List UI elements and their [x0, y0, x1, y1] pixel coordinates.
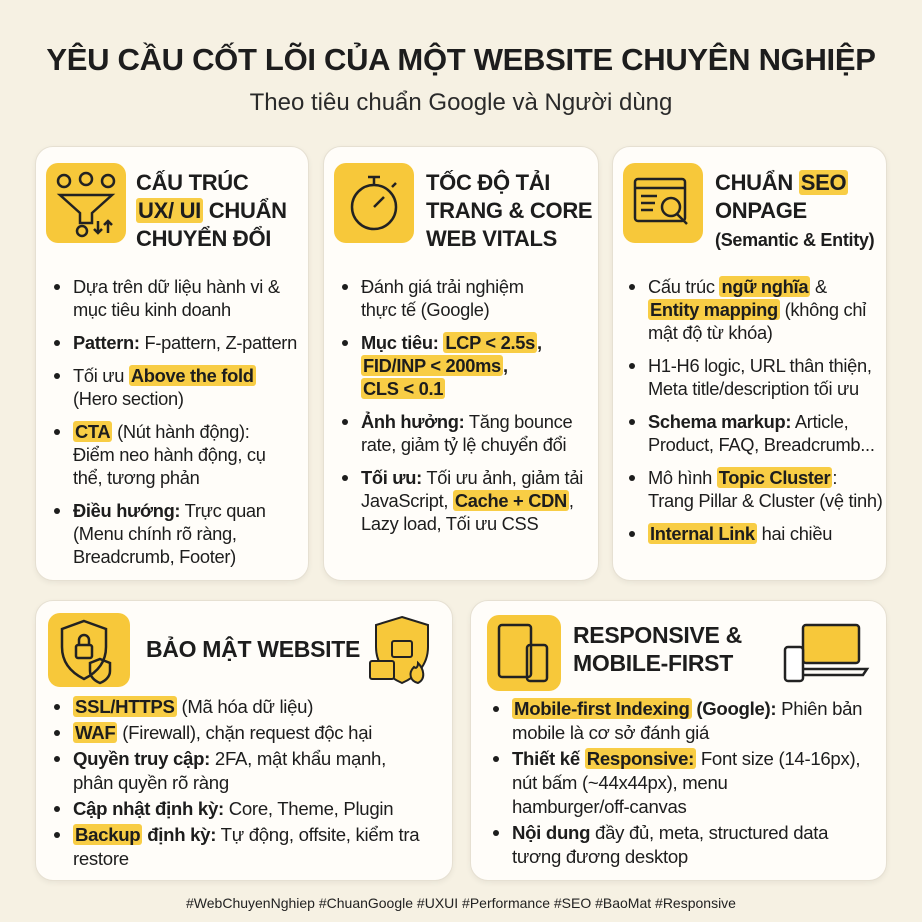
bullets: SSL/HTTPS (Mã hóa dữ liệu): [75, 696, 313, 717]
bullets: Lazy load, Tối ưu CSS: [361, 513, 538, 534]
bullets: Điều hướng: Trực quan: [73, 500, 266, 521]
bullets: phân quyền rõ ràng: [73, 772, 229, 793]
bullets: Nội dung đầy đủ, meta, structured data: [512, 822, 828, 843]
panel: SEO: [612, 146, 887, 581]
bullets: Ảnh hưởng: Tăng bounce: [361, 411, 572, 432]
bullets: restore: [73, 848, 129, 869]
heading: CHUẨN SEO: [715, 170, 846, 195]
bullets: Điểm neo hành động, cụ: [73, 444, 266, 465]
heading: UX/ UI CHUẨN: [138, 198, 287, 223]
icon: laptop & phone: [784, 624, 870, 682]
bullets: [54, 276, 297, 567]
heading: TRANG & CORE: [426, 198, 592, 223]
bullets: Backup định kỳ: Tự động, offsite, kiểm tra: [75, 824, 419, 845]
heading: WEB VITALS: [426, 226, 557, 251]
bullets: Mô hình Topic Cluster:: [648, 467, 837, 488]
bullets: mục tiêu kinh doanh: [73, 299, 231, 320]
bullets: JavaScript, Cache + CDN,: [361, 490, 574, 511]
bullets: FID/INP < 200ms,: [363, 355, 508, 376]
icon: SEO window: [623, 163, 703, 243]
bullets: Meta title/description tối ưu: [648, 378, 859, 399]
heading: [136, 170, 287, 251]
heading: MOBILE-FIRST: [573, 650, 733, 676]
bullets: Dựa trên dữ liệu hành vi &: [73, 276, 280, 297]
heading: CHUYỂN ĐỔI: [136, 226, 271, 251]
bullets: Product, FAQ, Breadcrumb...: [648, 434, 875, 455]
heading: BẢO MẬT WEBSITE: [146, 636, 360, 662]
bullets: Cấu trúc ngữ nghĩa &: [648, 276, 827, 297]
bullets: Tối ưu Above the fold: [73, 365, 254, 386]
heading: TỐC ĐỘ TẢI: [426, 170, 550, 195]
bullets: [629, 276, 883, 544]
bullets: tương đương desktop: [512, 846, 688, 867]
bullets: Tối ưu: Tối ưu ảnh, giảm tải: [361, 467, 583, 488]
bullets: Trang Pillar & Cluster (vệ tinh): [648, 490, 883, 511]
panel: UX/UI: [35, 146, 309, 581]
bullets: (Hero section): [73, 388, 184, 409]
bullets: Entity mapping (không chỉ: [650, 299, 866, 320]
heading: [573, 622, 742, 676]
panel: security: [35, 600, 453, 881]
bullets: thực tế (Google): [361, 299, 489, 320]
bullets: nút bấm (~44x44px), menu: [512, 772, 728, 793]
bullets: Quyền truy cập: 2FA, mật khẩu mạnh,: [73, 748, 386, 769]
heading: RESPONSIVE &: [573, 622, 742, 648]
bullets: mật độ từ khóa): [648, 322, 773, 343]
bullets: Đánh giá trải nghiệm: [361, 276, 524, 297]
bullets: [342, 276, 583, 534]
bullets: CLS < 0.1: [363, 378, 443, 399]
bullets: WAF (Firewall), chặn request độc hại: [75, 722, 372, 743]
bullets: Pattern: F-pattern, Z-pattern: [73, 332, 297, 353]
bullets: hamburger/off-canvas: [512, 796, 687, 817]
bullets: Mobile-first Indexing (Google): Phiên bản: [514, 698, 862, 719]
icon: ssl lock: [369, 616, 429, 684]
bullets: Cập nhật định kỳ: Core, Theme, Plugin: [73, 798, 393, 819]
bullets: Breadcrumb, Footer): [73, 546, 236, 567]
heading: [426, 170, 592, 251]
icon: shield: [48, 613, 130, 687]
bullets: Schema markup: Article,: [648, 411, 848, 432]
bullets: CTA (Nút hành động):: [75, 421, 250, 442]
heading: ONPAGE: [715, 198, 807, 223]
bullets: Thiết kế Responsive: Font size (14-16px),: [512, 748, 860, 769]
bullets: rate, giảm tỷ lệ chuyển đổi: [361, 434, 566, 455]
subtitle: Theo tiêu chuẩn Google và Người dùng: [250, 89, 672, 116]
panel: responsive: [470, 600, 887, 881]
bullets: Mục tiêu: LCP < 2.5s,: [361, 332, 542, 353]
bullets: thể, tương phản: [73, 467, 199, 488]
bullets: H1-H6 logic, URL thân thiện,: [648, 355, 872, 376]
icon: funnel: [46, 163, 126, 243]
panel: speed: [323, 146, 599, 581]
bullets: (Menu chính rõ ràng,: [73, 523, 237, 544]
heading: (Semantic & Entity): [715, 230, 874, 250]
bullets: [54, 696, 420, 869]
heading: [715, 170, 874, 250]
bullets: [493, 698, 862, 867]
bullets: mobile là cơ sở đánh giá: [512, 722, 709, 743]
icon: stopwatch: [334, 163, 414, 243]
heading: CẤU TRÚC: [136, 170, 248, 195]
hashtags: #WebChuyenNghiep #ChuanGoogle #UXUI #Performance #SEO #BaoMat #Responsive: [186, 895, 736, 911]
icon: devices: [487, 615, 561, 691]
title: YÊU CẦU CỐT LÕI CỦA MỘT WEBSITE CHUYÊN NGHIỆP: [46, 42, 876, 77]
bullets: Internal Link hai chiều: [650, 523, 832, 544]
